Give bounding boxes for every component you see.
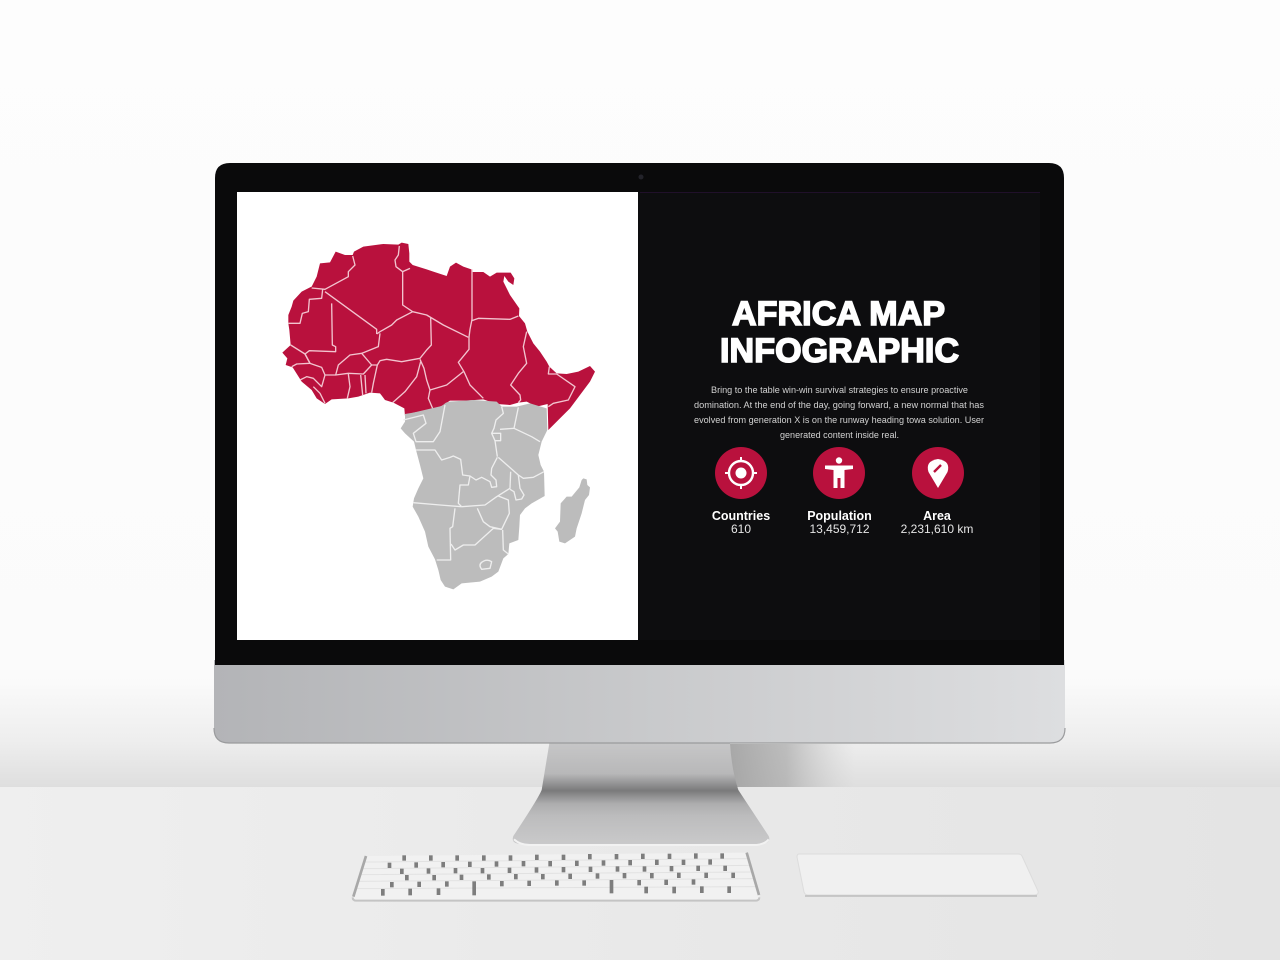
label: countries: Countries xyxy=(712,509,770,523)
southern Africa in grey xyxy=(401,400,590,589)
monitor chin xyxy=(214,660,1065,743)
screen: left white panel xyxy=(237,192,638,640)
keyboard xyxy=(353,853,759,901)
northern Africa in red xyxy=(282,243,595,430)
monitor stand xyxy=(513,743,769,845)
southern country borders xyxy=(403,405,544,569)
icon: person xyxy=(813,447,865,499)
icon: target xyxy=(715,447,767,499)
title xyxy=(720,295,959,370)
body text xyxy=(694,385,985,440)
stat: countries xyxy=(712,447,770,536)
value: area: 2,231,610 km xyxy=(901,522,973,536)
Africa map xyxy=(282,243,595,589)
label: population: Population xyxy=(807,509,872,523)
stand shadow on the wall xyxy=(730,744,855,787)
label: area: Area xyxy=(923,509,952,523)
title: AFRICA MAP xyxy=(732,295,945,333)
icon: Madagascar xyxy=(555,478,590,543)
webcam xyxy=(638,174,644,180)
body text: Bring to the table win-win survival strategies to ensure proactive xyxy=(711,385,968,395)
icon: map pin xyxy=(912,447,964,499)
value: population: 13,459,712 xyxy=(809,522,870,536)
screen: right dark panel xyxy=(638,192,1040,640)
stat: area xyxy=(901,447,973,536)
body text: evolved from generation X is on the runway heading towa solution. User xyxy=(694,415,984,425)
value: countries: 610 xyxy=(731,522,751,536)
northern country borders xyxy=(288,246,575,410)
desk surface xyxy=(0,787,1280,960)
title: INFOGRAPHIC xyxy=(720,332,959,370)
stat: population xyxy=(807,447,872,536)
body text: domination. At the end of the day, going forward, a new normal that has xyxy=(694,400,985,410)
body text: generated content inside real. xyxy=(780,430,899,440)
trackpad xyxy=(797,854,1038,896)
monitor body xyxy=(214,163,1065,743)
monitor bezel xyxy=(215,163,1064,665)
